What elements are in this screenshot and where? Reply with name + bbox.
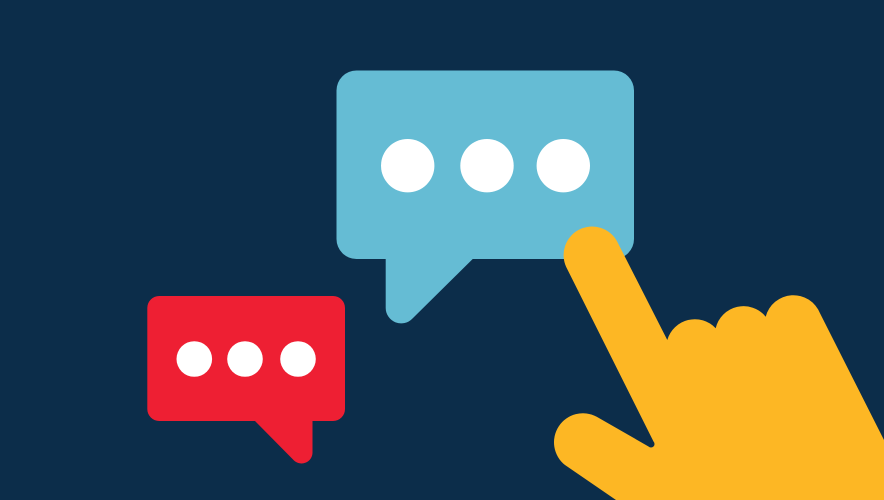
red bubble dots: [176, 341, 316, 377]
blue bubble dots: [381, 139, 590, 192]
icon: blue speech bubble: [336, 70, 634, 323]
icon: yellow pointing hand: [554, 227, 884, 500]
red bubble body with tail: [147, 296, 345, 463]
icon: red speech bubble: [147, 296, 345, 463]
blue bubble body with tail: [336, 70, 634, 323]
